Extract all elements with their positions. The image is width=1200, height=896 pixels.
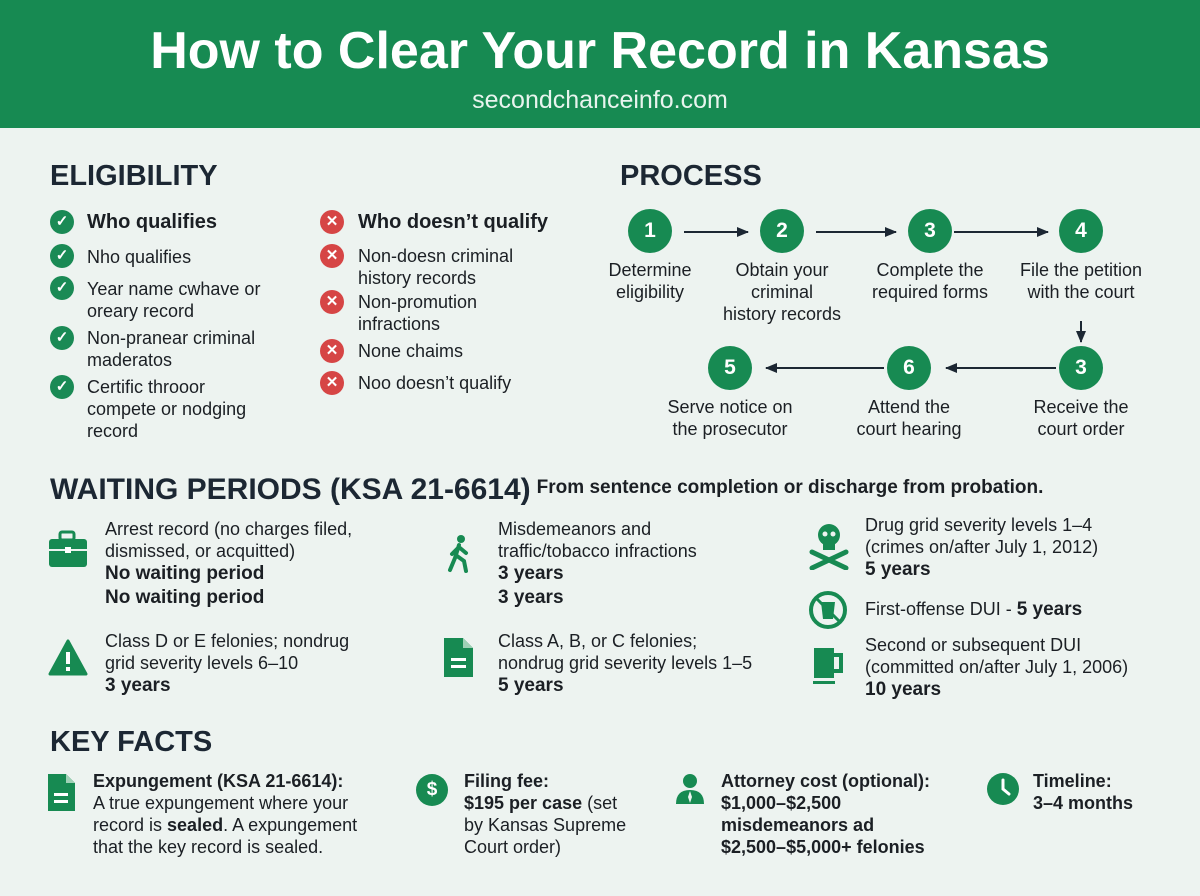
waiting item: misdemeanors: traffic/tobacco infractions — [498, 541, 697, 561]
waiting item: first DUI — [809, 591, 1082, 629]
waiting item: drug grid: (crimes on/after July 1, 2012) — [865, 537, 1098, 557]
fact: expungement: A true expungement where your — [93, 793, 348, 813]
waiting item: misdemeanors: 3 years — [498, 587, 564, 608]
panel: who doesn't qualify: Noo doesn’t qualify — [358, 373, 511, 393]
waiting item: drug grid — [810, 515, 1098, 580]
fact: expungement: Expungement (KSA 21-6614): — [93, 771, 343, 791]
waiting item: arrest record — [49, 519, 352, 608]
panel: who doesn't qualify: ✕ — [326, 293, 338, 310]
waiting periods heading: WAITING PERIODS (KSA 21-6614) From sentence completion or discharge from probation. — [50, 473, 1043, 506]
icon: no drinking — [809, 591, 847, 629]
waiting item: arrest record: Arrest record (no charges filed, — [105, 519, 352, 539]
process flow: eligibility — [616, 282, 684, 302]
process flow: Determine — [608, 260, 692, 280]
waiting item: class D/E: Class D or E felonies; nondrug — [105, 631, 349, 651]
waiting item: class A/B/C: 5 years — [498, 675, 564, 696]
waiting item: class A/B/C: nondrug grid severity levels 1–5 — [498, 653, 752, 673]
waiting item: second DUI: (committed on/after July 1, 2006) — [865, 657, 1128, 677]
fact: attorney cost: $1,000–$2,500 — [721, 793, 841, 813]
panel: who doesn't qualify: Non-promution — [358, 292, 477, 312]
icon: document — [444, 638, 473, 677]
title: How to Clear Your Record in Kansas — [150, 22, 1050, 80]
process flow: 5 — [724, 356, 736, 379]
subtitle: secondchanceinfo.com — [472, 86, 728, 114]
panel: who qualifies — [50, 210, 260, 441]
eligibility heading: ELIGIBILITY — [50, 160, 218, 192]
fact: timeline: 3–4 months — [1033, 793, 1133, 813]
fact: expungement: record is sealed. A expungement — [93, 815, 357, 835]
panel: who qualifies: Non-pranear criminal — [87, 328, 255, 348]
icon: person — [676, 774, 704, 804]
process flow — [608, 209, 1142, 439]
panel: who qualifies: ✓ — [56, 247, 68, 264]
icon: warning — [48, 639, 88, 676]
process flow: history records — [723, 304, 841, 324]
process flow: court order — [1037, 419, 1125, 439]
icon: dollar: $ — [427, 779, 437, 800]
header banner — [0, 0, 1200, 128]
process flow: Receive the — [1033, 397, 1129, 417]
waiting item: class D/E: 3 years — [105, 675, 171, 696]
fact: attorney cost: Attorney cost (optional): — [721, 771, 930, 791]
panel: who qualifies: Year name cwhave or — [87, 279, 260, 299]
panel: who doesn't qualify: history records — [358, 268, 476, 288]
waiting item: class A/B/C: Class A, B, or C felonies; — [498, 631, 697, 651]
icon: briefcase — [49, 530, 87, 567]
panel: who qualifies: ✓ — [56, 279, 68, 296]
waiting item: arrest record: No waiting period — [105, 563, 264, 584]
panel: who qualifies: Who qualifies — [87, 211, 217, 233]
fact: filing fee — [416, 771, 626, 857]
fact: timeline — [987, 771, 1133, 813]
process flow: Obtain your — [735, 260, 829, 280]
panel: who qualifies: maderatos — [87, 350, 172, 370]
process flow: the prosecutor — [672, 419, 788, 439]
fact: expungement — [48, 771, 357, 857]
waiting item: class A/B/C — [444, 631, 752, 696]
process flow: 3 — [1075, 356, 1087, 379]
fact: filing fee: $195 per case (set — [464, 793, 617, 813]
fact: attorney cost: misdemeanors ad — [721, 815, 874, 835]
waiting item: class D/E: grid severity levels 6–10 — [105, 653, 298, 673]
waiting item: arrest record: dismissed, or acquitted) — [105, 541, 295, 561]
waiting item: second DUI — [813, 635, 1128, 700]
panel: who qualifies: Certific throoor — [87, 377, 205, 397]
process flow: Serve notice on — [667, 397, 793, 417]
icon: beer mug — [813, 648, 843, 684]
process flow: with the court — [1027, 282, 1135, 302]
panel: who qualifies: oreary record — [87, 301, 194, 321]
panel: who doesn't qualify: ✕ — [326, 342, 338, 359]
fact: expungement: that the key record is sealed. — [93, 837, 323, 857]
panel: who qualifies: compete or nodging — [87, 399, 246, 419]
panel: who doesn't qualify: ✕ — [326, 213, 338, 230]
process flow: court hearing — [856, 419, 962, 439]
waiting item: misdemeanors — [448, 519, 697, 608]
panel: who qualifies: ✓ — [56, 378, 68, 395]
panel: who qualifies: ✓ — [56, 213, 68, 230]
icon: walking person — [448, 535, 468, 573]
process flow: 1 — [644, 219, 656, 242]
waiting item: first DUI: First-offense DUI - 5 years — [865, 599, 1082, 620]
key facts heading: KEY FACTS — [50, 726, 212, 758]
fact: attorney cost — [676, 771, 930, 857]
waiting item: drug grid: Drug grid severity levels 1–4 — [865, 515, 1092, 535]
fact: filing fee: Filing fee: — [464, 771, 549, 791]
waiting item: second DUI: Second or subsequent DUI — [865, 635, 1081, 655]
panel: who doesn't qualify: ✕ — [326, 247, 338, 264]
fact: filing fee: Court order) — [464, 837, 561, 857]
process flow: criminal — [751, 282, 813, 302]
waiting item: class D/E — [48, 631, 349, 696]
process heading: PROCESS — [620, 160, 762, 192]
icon: clock — [987, 773, 1019, 805]
panel: who qualifies: ✓ — [56, 329, 68, 346]
panel: who qualifies: record — [87, 421, 138, 441]
icon: skull and crossbones — [810, 524, 848, 570]
fact: attorney cost: $2,500–$5,000+ felonies — [721, 837, 925, 857]
fact: timeline: Timeline: — [1033, 771, 1112, 791]
process flow: 3 — [924, 219, 936, 242]
process flow: 2 — [776, 219, 788, 242]
panel: who doesn't qualify: Non-doesn criminal — [358, 246, 513, 266]
panel: who doesn't qualify — [320, 210, 548, 395]
waiting item: arrest record: No waiting period — [105, 587, 264, 608]
panel: who doesn't qualify: None chaims — [358, 341, 463, 361]
process flow: required forms — [872, 282, 988, 302]
process flow: 6 — [903, 356, 915, 379]
process flow: 4 — [1075, 219, 1087, 242]
process flow: File the petition — [1020, 260, 1142, 280]
fact: filing fee: by Kansas Supreme — [464, 815, 626, 835]
panel: who doesn't qualify: Who doesn’t qualify — [358, 211, 548, 233]
panel: who doesn't qualify: ✕ — [326, 374, 338, 391]
process flow: Attend the — [868, 397, 950, 417]
waiting item: second DUI: 10 years — [865, 679, 941, 700]
panel: who doesn't qualify: infractions — [358, 314, 440, 334]
icon: dollar — [416, 774, 448, 806]
panel: who qualifies: Nho qualifies — [87, 247, 191, 267]
icon: document — [48, 774, 75, 811]
waiting item: drug grid: 5 years — [865, 559, 931, 580]
process flow: Complete the — [876, 260, 984, 280]
waiting item: misdemeanors: Misdemeanors and — [498, 519, 651, 539]
waiting item: misdemeanors: 3 years — [498, 563, 564, 584]
